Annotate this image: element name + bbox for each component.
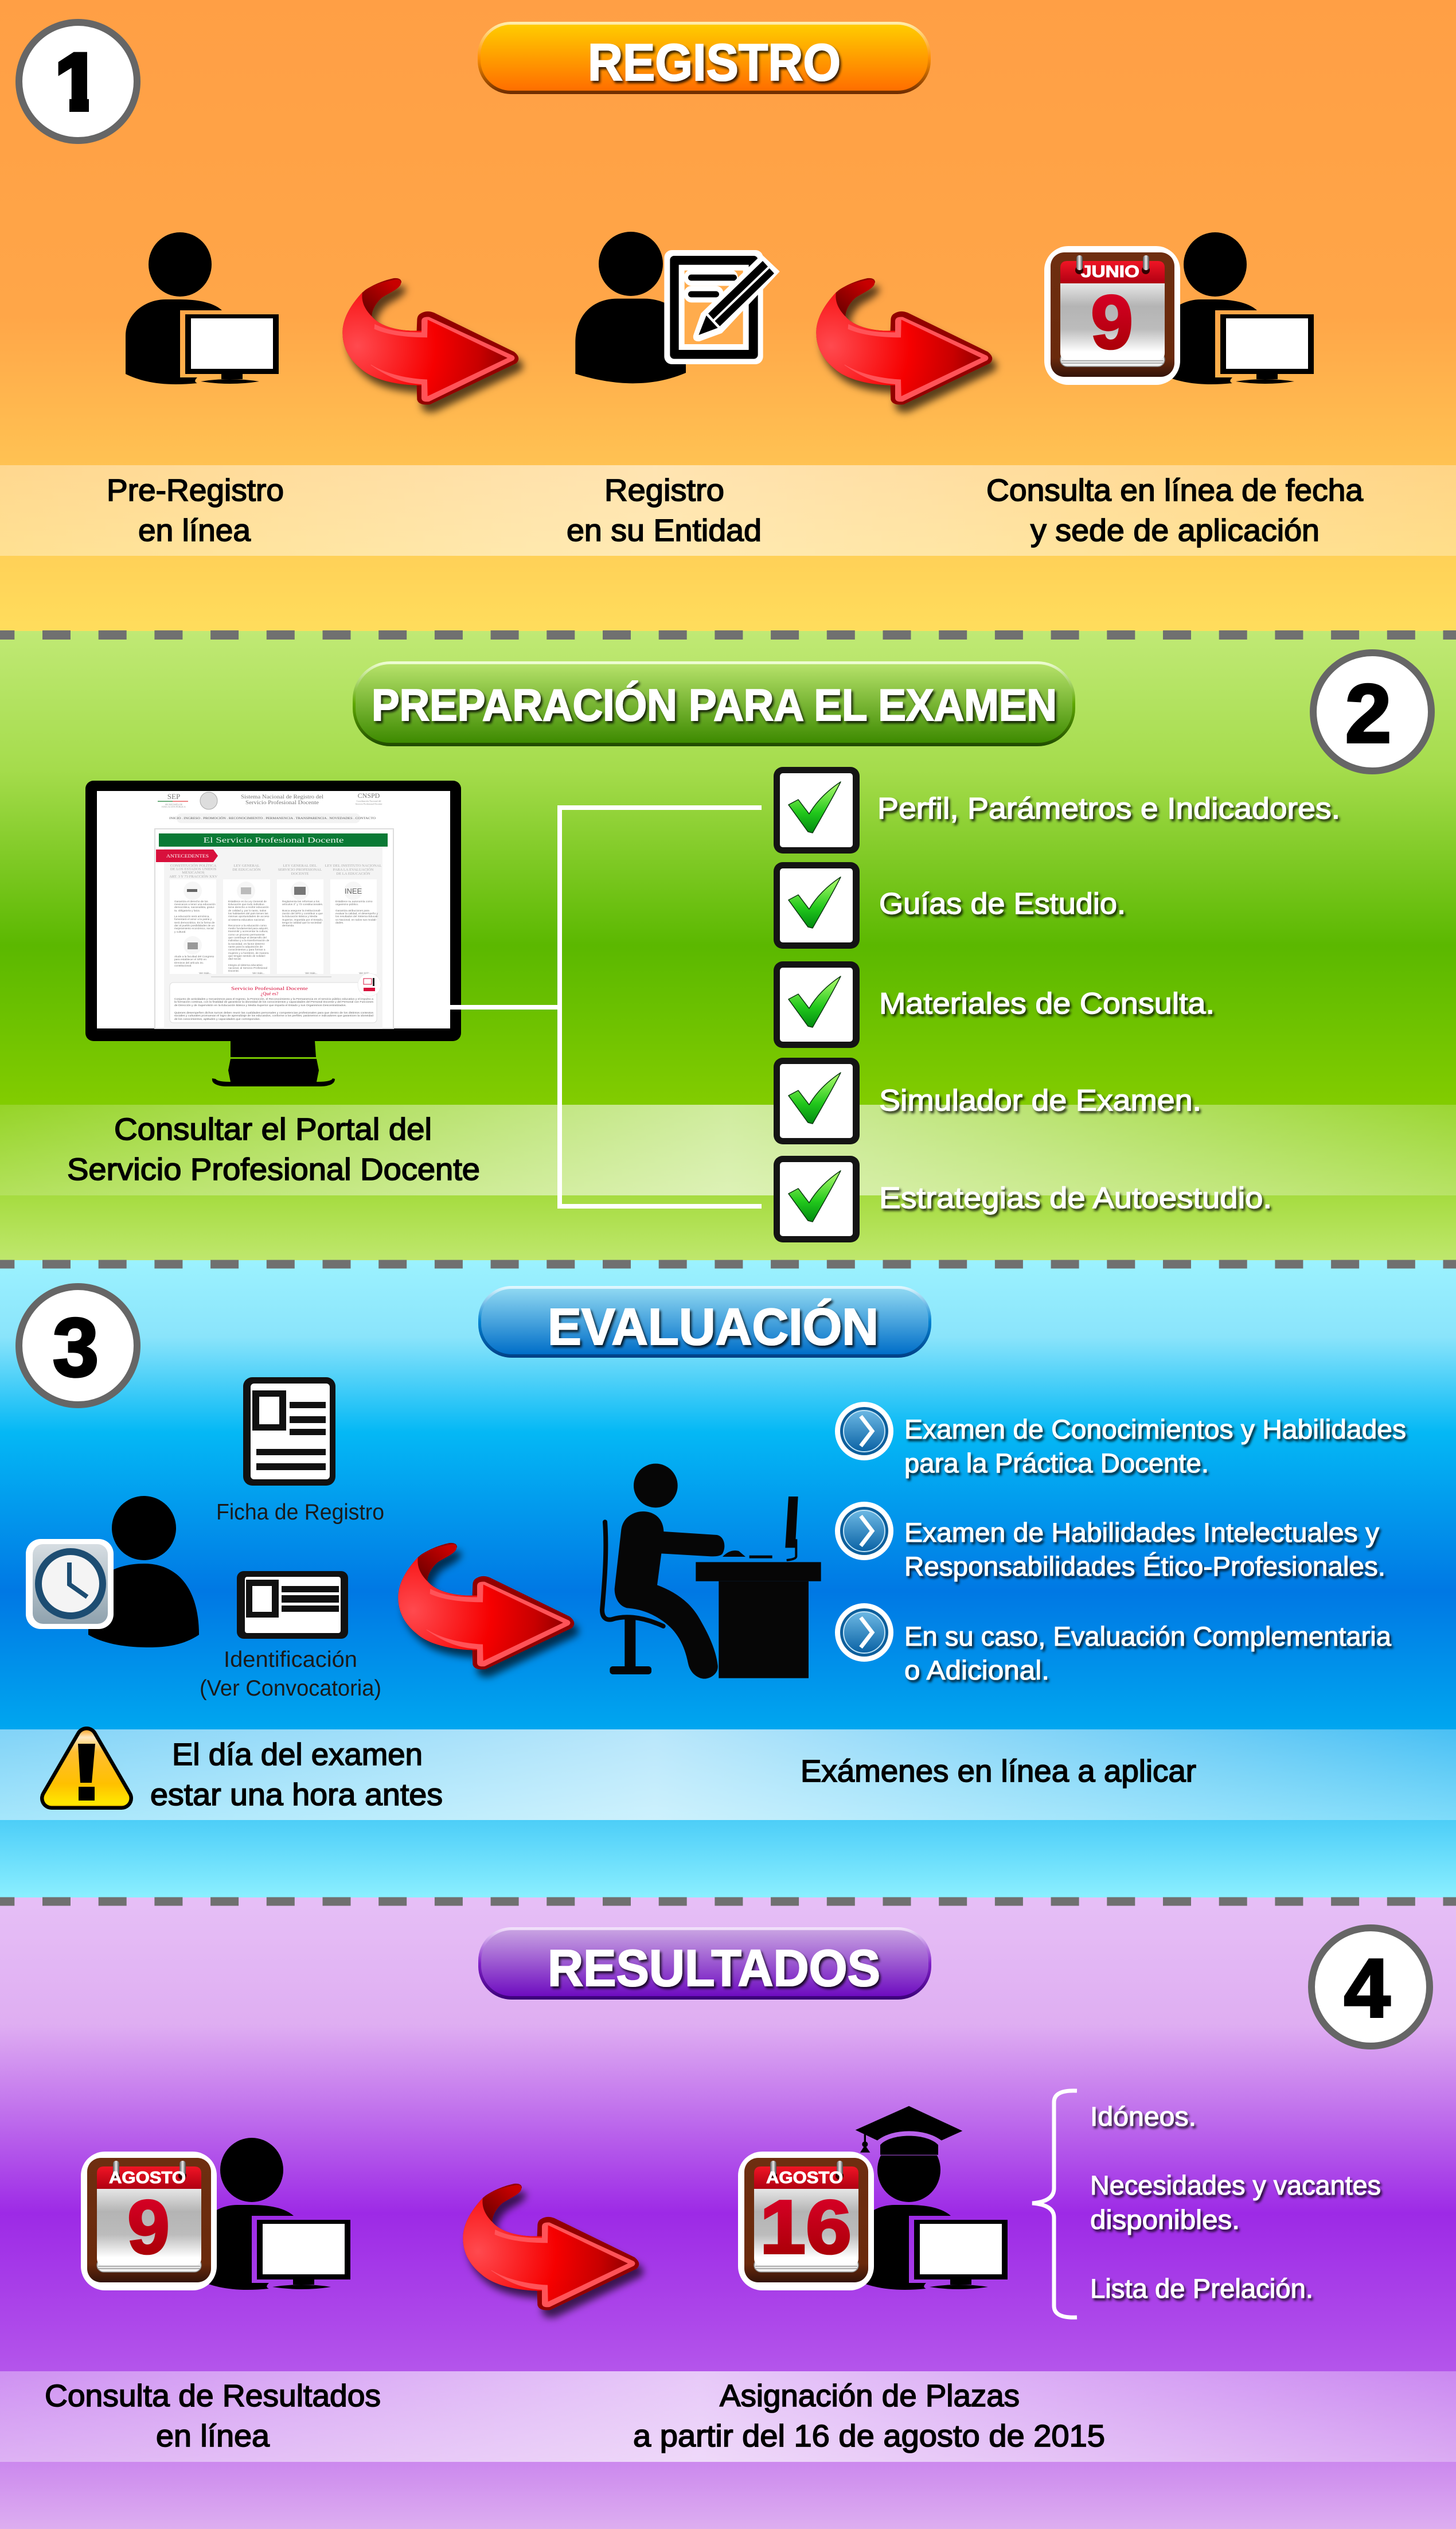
portal screenshot: artículos 3° y 73 constitucionales. <box>282 903 323 906</box>
bullet: exam 2 <box>835 1502 893 1560</box>
portal screenshot: mismas oportunidades de acceso <box>228 915 270 918</box>
list: results: Necesidades y vacantes <box>1090 2170 1381 2200</box>
portal screenshot: ART. 3 Y 73 FRACCIÓN XXV <box>169 874 217 879</box>
list: materials: Perfil, Parámetros e Indicadores. <box>877 792 1340 825</box>
checkbox: simulador <box>774 1058 860 1144</box>
portal screenshot: Sistema Nacional de Registro del <box>241 794 324 800</box>
list: materials <box>877 792 1340 1215</box>
portal screenshot: Ver más... <box>305 972 318 975</box>
portal screenshot: LEY DEL INSTITUTO NACIONAL <box>325 864 381 868</box>
portal screenshot: Establece su autonomía como <box>335 900 373 903</box>
portal screenshot: mujeres y a hombres, de manera <box>228 952 269 955</box>
list: results: Idóneos. <box>1090 2101 1196 2131</box>
portal screenshot: democrática, nacionalista, gratui- <box>174 906 215 909</box>
portal screenshot: Establece en la Ley General de <box>228 900 267 903</box>
list: results: Lista de Prelación. <box>1090 2273 1313 2304</box>
step number 1 <box>19 22 137 141</box>
bullet: exam 1 <box>835 1402 893 1460</box>
heading: registro: REGISTRO <box>588 34 841 92</box>
connector lines <box>450 808 762 1206</box>
label: día del examen: estar una hora antes <box>150 1778 443 1812</box>
heading: registro <box>478 22 931 94</box>
portal screenshot: LEY GENERAL <box>234 864 259 868</box>
portal screenshot: MEXICANOS <box>182 871 205 875</box>
label: identificación: Identificación <box>224 1647 357 1672</box>
icon: person at computer <box>126 232 279 384</box>
portal screenshot: los resultados del Sistema Educati- <box>335 915 378 918</box>
list: exams <box>904 1414 1406 1685</box>
portal screenshot: Reglamenta las reformas a los <box>282 900 320 903</box>
icon: person with clock <box>26 1496 199 1647</box>
portal screenshot: Ver más... <box>252 972 265 975</box>
portal screenshot: Servicio Profesional Docente <box>245 800 319 805</box>
portal screenshot: ta, obligatoria y laica. <box>174 909 200 913</box>
checkbox: materiales <box>774 961 860 1048</box>
portal screenshot <box>155 792 393 1028</box>
portal screenshot: DE LA EDUCACIÓN <box>336 871 370 876</box>
portal screenshot: Busca asegurar la institucionali- <box>282 909 321 913</box>
portal screenshot: El Servicio Profesional Docente <box>203 836 344 845</box>
panel: preparación para el examen <box>0 631 1456 1260</box>
portal screenshot: términos del artículo 3o. <box>174 961 204 965</box>
portal screenshot: Servicio Profesional Docente <box>231 985 308 991</box>
portal screenshot: dades. <box>335 921 343 925</box>
step number 3 <box>19 1287 137 1405</box>
list: materials: Guías de Estudio. <box>879 887 1126 921</box>
list: materials: Materiales de Consulta. <box>879 987 1215 1020</box>
heading: evaluación: EVALUACIÓN <box>548 1298 879 1356</box>
label: día del examen <box>150 1737 443 1812</box>
portal screenshot: será democrática. Es la forma de <box>174 921 215 925</box>
label: pre-registro <box>107 473 284 548</box>
checkbox: perfil <box>774 767 860 854</box>
label: consulta de resultados <box>45 2379 381 2453</box>
label: pre-registro: en línea <box>138 513 251 548</box>
portal screenshot: Garantiza el derecho de los <box>174 900 208 903</box>
arrow <box>398 1543 574 1669</box>
label: día del examen: El día del examen <box>172 1737 423 1772</box>
list: results <box>1090 2101 1381 2304</box>
portal screenshot: de Dirección y de Supervisión en la Educación Básica y Media Superior que imparta el Estado y sus Organismos Descentralizados. <box>174 1004 346 1007</box>
portal screenshot: Docente. <box>228 969 239 973</box>
portal screenshot: como un proceso permanente <box>228 933 265 937</box>
label: registro <box>567 473 762 548</box>
label: identificación <box>200 1647 381 1701</box>
label: consulta de resultados: Consulta de Resultados <box>45 2379 381 2413</box>
heading: resultados: RESULTADOS <box>548 1940 880 1997</box>
label: pre-registro: Pre-Registro <box>107 473 284 508</box>
portal screenshot: Superior, impartida por el Estado, <box>282 918 323 922</box>
portal screenshot: zación del SPD y contribuir a que <box>282 912 323 915</box>
step number 4: 4 <box>1344 1942 1390 2035</box>
portal screenshot: fomentará el amor a la patria y <box>174 918 212 921</box>
icon: person sitting at computer desk <box>602 1464 821 1679</box>
portal screenshot: Alude a la facultad del Congreso <box>174 955 214 958</box>
portal screenshot: que tengan sentido de solidari- <box>228 954 266 958</box>
portal screenshot: DOCENTE <box>291 872 309 876</box>
portal screenshot: sociales y culturales promuevan el logro de aprendizaje de los educandos, conforme a los perfiles, parámetros e indicadores que garanticen la idoneidad <box>174 1014 373 1018</box>
label: consultar portal: Consultar el Portal del <box>114 1112 432 1147</box>
portal screenshot: dad social. <box>228 957 241 961</box>
panel: evaluación <box>0 1260 1456 1897</box>
list: materials: Estrategias de Autoestudio. <box>879 1182 1272 1215</box>
label: consulta <box>986 473 1364 548</box>
portal screenshot: Reconoce a la educación como <box>228 924 267 928</box>
label: registro: en su Entidad <box>567 513 762 548</box>
label: consultar portal <box>67 1112 480 1187</box>
portal screenshot: conocimientos y para formar a <box>228 948 266 952</box>
portal screenshot: Coordinación Nacional del <box>356 800 381 802</box>
icon: monitor with portal <box>85 781 461 1086</box>
portal screenshot: ANTECEDENTES <box>166 853 209 859</box>
panel: resultados <box>0 1897 1456 2529</box>
portal screenshot: SEP <box>167 792 180 801</box>
portal screenshot: INICIO . INGRESO . PROMOCIÓN . RECONOCIMIENTO . PERMANENCIA . TRANSPARENCIA . NOVEDADES . CONTACTO <box>169 816 376 820</box>
heading: resultados <box>478 1927 931 2000</box>
label: registro: Registro <box>604 473 724 508</box>
list: exams: o Adicional. <box>904 1655 1049 1685</box>
label: asignación de plazas: Asignación de Plazas <box>720 2379 1020 2413</box>
portal screenshot: Ver más... <box>199 972 212 975</box>
portal screenshot: constitucional. <box>174 964 192 968</box>
portal screenshot: Educación que todo individuo <box>228 903 264 906</box>
portal screenshot: CONSTITUCIÓN POLÍTICA <box>170 863 216 868</box>
bullet: exam 3 <box>835 1603 893 1662</box>
portal screenshot: nante para la adquisición de <box>228 945 263 949</box>
portal screenshot: Garantiza atribuciones para <box>335 909 369 913</box>
step number 4 <box>1311 1928 1430 2046</box>
portal screenshot: tenga la calidad que la sociedad <box>282 921 322 925</box>
icon: calendar august 9 with person <box>81 2138 350 2290</box>
portal screenshot: evaluar la calidad, el desempeño y <box>335 912 378 915</box>
portal screenshot: los habitantes del país tienen las <box>228 912 268 915</box>
portal screenshot: La educación será armónica, <box>174 915 210 918</box>
portal screenshot: mejoramiento económico, social <box>174 927 214 930</box>
portal screenshot: Integra al sistema educativo <box>228 964 263 967</box>
portal screenshot: de calidad y, por lo tanto, todos <box>228 909 267 913</box>
checkbox: guías <box>774 862 860 949</box>
portal screenshot: medio fundamental para adquirir, <box>228 927 268 930</box>
list: exams: Responsabilidades Ético-Profesionales. <box>904 1551 1385 1581</box>
label: consulta de resultados: en línea <box>156 2419 270 2453</box>
portal screenshot: DE EDUCACIÓN <box>232 867 261 872</box>
step number 3: 3 <box>53 1301 99 1394</box>
heading: preparación <box>353 661 1075 746</box>
portal screenshot: LEY GENERAL DEL <box>283 864 317 868</box>
icon: warning <box>52 1738 122 1801</box>
portal screenshot: la sociedad, es factor determi- <box>228 942 266 946</box>
portal screenshot: y cultural. <box>174 930 186 934</box>
label: consulta: y sede de aplicación <box>1030 513 1320 548</box>
portal screenshot: vo Nacional, en todos sus modali- <box>335 918 377 922</box>
icon: identificación <box>237 1571 348 1639</box>
portal screenshot: SERVICIO PROFESIONAL <box>278 868 322 872</box>
label: asignación de plazas: a partir del 16 de agosto de 2015 <box>633 2419 1105 2453</box>
portal screenshot: EDUCACIÓN PÚBLICA <box>162 805 186 808</box>
portal screenshot: al sistema educativo nacional. <box>228 918 265 922</box>
checkbox: estrategias <box>774 1156 860 1242</box>
portal screenshot: la Educación Básica y Media <box>282 915 318 918</box>
step number 2: 2 <box>1345 667 1391 760</box>
portal screenshot: mexicanos a tener una educación <box>174 903 216 906</box>
icon: calendar june 9 with person <box>1044 232 1314 385</box>
heading: preparación: PREPARACIÓN PARA EL EXAMEN <box>372 680 1057 730</box>
portal screenshot: dar al pueblo posibilidades de un <box>174 924 214 928</box>
icon: calendar august 16 with graduate: 16 <box>760 2185 852 2269</box>
list: exams: para la Práctica Docente. <box>904 1448 1209 1478</box>
step number 2 <box>1313 653 1431 771</box>
label: asignación de plazas <box>633 2379 1105 2453</box>
panel: registro <box>0 0 1456 631</box>
portal screenshot: que contribuye al desarrollo del <box>228 936 267 940</box>
list: exams: Examen de Conocimientos y Habilidades <box>904 1414 1406 1444</box>
portal screenshot: INEE <box>345 887 362 895</box>
portal screenshot: Servicio Profesional Docente <box>356 802 382 805</box>
heading: evaluación <box>478 1286 931 1358</box>
portal screenshot: Ver más... <box>359 972 372 975</box>
icon: calendar june 9 with person: 9 <box>1091 280 1133 364</box>
icon: person with form and pencil <box>575 232 779 383</box>
arrow <box>342 278 518 404</box>
portal screenshot: demanda. <box>282 924 294 928</box>
portal screenshot: nacional, al Servicio Profesional <box>228 967 267 970</box>
portal screenshot: organismo público. <box>335 903 358 906</box>
label: identificación: (Ver Convocatoria) <box>200 1676 381 1701</box>
portal screenshot: de los conocimientos, aptitudes y capacidades que correspondan. <box>174 1018 260 1021</box>
list: exams: Examen de Habilidades Intelectuales y <box>904 1517 1379 1548</box>
list: exams: En su caso, Evaluación Complementaria <box>904 1621 1392 1651</box>
portal screenshot: Conjunto de actividades y mecanismos para el Ingreso, la Promoción, el Reconocimiento y la Permanencia en el servicio público educativo y el impulso a <box>174 997 373 1001</box>
icon: calendar june 9 with person: JUNIO <box>1081 263 1139 281</box>
portal screenshot: PARA LA EVALUACIÓN <box>333 867 374 872</box>
label: exámenes en línea: Exámenes en línea a aplicar <box>801 1754 1196 1788</box>
portal screenshot: CNSPD <box>358 792 380 800</box>
portal screenshot: tiene derecho a recibir educación <box>228 906 269 909</box>
icon: calendar august 9 with person: AGOSTO <box>109 2169 186 2187</box>
portal screenshot: DE LOS ESTADOS UNIDOS <box>170 867 216 871</box>
icon: calendar august 16 with graduate: AGOSTO <box>766 2169 843 2187</box>
list: results: disponibles. <box>1090 2204 1240 2235</box>
icon: ficha de registro <box>243 1377 335 1486</box>
list: materials: Simulador de Examen. <box>879 1084 1201 1117</box>
step number 1: 1 <box>55 37 100 127</box>
arrow <box>463 2184 639 2310</box>
portal screenshot: Quienes desempeñen dichos turnos deben reunir las cualidades personales y competencias profesionales para que dentro de los distintos contextos <box>174 1011 374 1015</box>
brace <box>1032 2091 1077 2317</box>
arrow <box>816 278 992 404</box>
portal screenshot: individuo y a la transformación de <box>228 939 270 942</box>
portal screenshot: SECRETARÍA DE <box>165 803 183 806</box>
label: consultar portal: Servicio Profesional Docente <box>67 1152 480 1187</box>
label: ficha de registro: Ficha de Registro <box>216 1500 384 1525</box>
icon: calendar august 16 with graduate <box>738 2106 1008 2290</box>
label: consulta: Consulta en línea de fecha <box>986 473 1364 508</box>
portal screenshot: ¿Qué es? <box>261 991 279 996</box>
portal screenshot: para establecer el SPD en <box>174 958 206 961</box>
portal screenshot: la formación continua, con la finalidad de garantizar la idoneidad de los conocimientos y capacidades del Personal Docente y del Personal con Funciones <box>174 1000 374 1004</box>
icon: calendar august 9 with person: 9 <box>127 2185 170 2269</box>
portal screenshot: transmitir y acrecentar la cultura; <box>228 930 268 933</box>
